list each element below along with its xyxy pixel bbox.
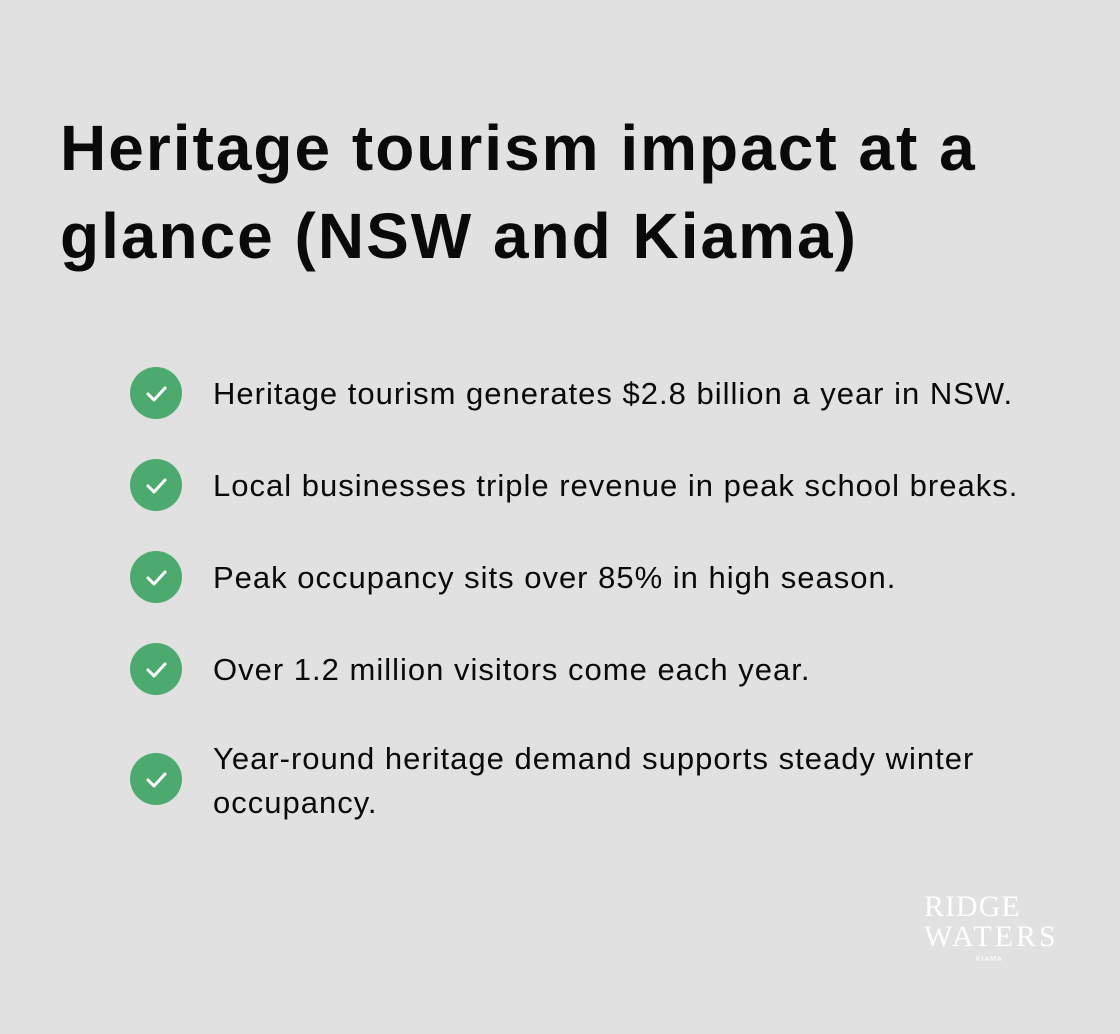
item 3 xyxy=(130,551,896,603)
text: Over 1.2 million visitors come each year. xyxy=(213,652,810,687)
title xyxy=(60,112,977,272)
title: glance (NSW and Kiama) xyxy=(60,200,858,272)
logo: RIDGE xyxy=(924,890,1021,923)
logo: KIAMA xyxy=(976,956,1003,963)
text: Heritage tourism generates $2.8 billion a year in NSW. xyxy=(213,376,1013,411)
title: Heritage tourism impact at a xyxy=(60,112,977,184)
text: Peak occupancy sits over 85% in high season. xyxy=(213,560,896,595)
item 2 xyxy=(130,459,1018,511)
icon: check xyxy=(130,643,182,695)
text: Year-round heritage demand supports steady winter xyxy=(213,741,974,776)
icon: check xyxy=(130,367,182,419)
logo: WATERS xyxy=(924,920,1059,953)
icon: check xyxy=(130,459,182,511)
text xyxy=(213,741,974,820)
item 5 xyxy=(130,741,974,820)
text: Local businesses triple revenue in peak school breaks. xyxy=(213,468,1018,503)
item 4 xyxy=(130,643,810,695)
text: occupancy. xyxy=(213,785,378,820)
icon: check xyxy=(130,551,182,603)
logo xyxy=(924,890,1059,963)
item 1 xyxy=(130,367,1013,419)
icon: check xyxy=(130,753,182,805)
